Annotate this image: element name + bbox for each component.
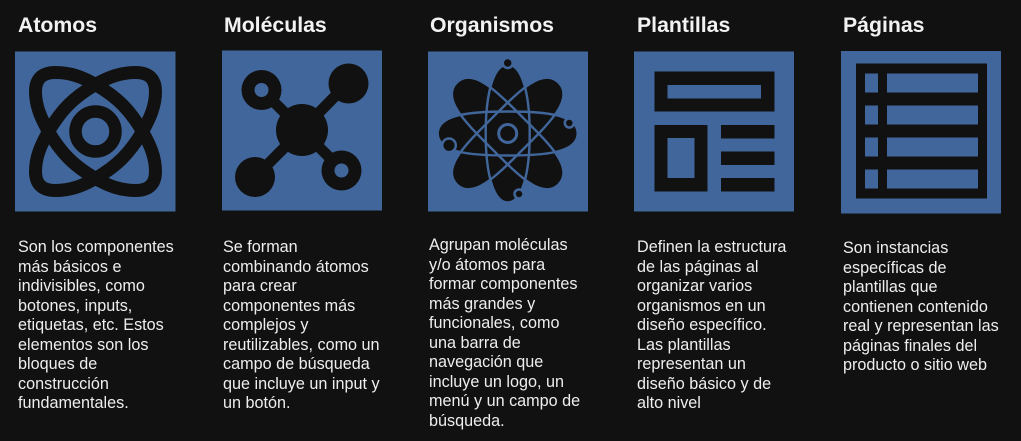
heading: Atomos: Atomos [18, 13, 97, 37]
text: Plantillas description: Definen la estructura de las páginas al organizar varios organismos en un diseño específico. Las plantillas representan un diseño básico y de alto nivel [637, 238, 786, 412]
heading: Moléculas: Moléculas [224, 13, 327, 37]
icon: page [841, 51, 1001, 214]
text: Moléculas description: Se forman combinando átomos para crear componentes más complejos y reutilizables, como un campo de búsqueda que incluye un input y un botón. [223, 238, 380, 412]
text: Organismos description: Agrupan moléculas y/o átomos para formar componentes más grandes y funcionales, como una barra de navegación que incluye un logo, un menú y un campo de búsqueda. [429, 236, 580, 430]
heading: Organismos: Organismos [430, 13, 554, 37]
icon: organism [428, 52, 588, 212]
text: Páginas description: Son instancias específicas de plantillas que contienen contenido real y representan las páginas finales del producto o sitio web [843, 239, 999, 374]
icon: molecule [222, 50, 382, 210]
icon: atom [15, 52, 176, 212]
heading: Páginas: Páginas [843, 13, 924, 37]
heading: Plantillas: Plantillas [637, 13, 730, 37]
icon: template [634, 52, 794, 212]
text: Atomos description: Son los componentes más básicos e indivisibles, como botones, inputs, etiquetas, etc. Estos elementos son los bloques de construcción fundamentales. [18, 238, 174, 412]
